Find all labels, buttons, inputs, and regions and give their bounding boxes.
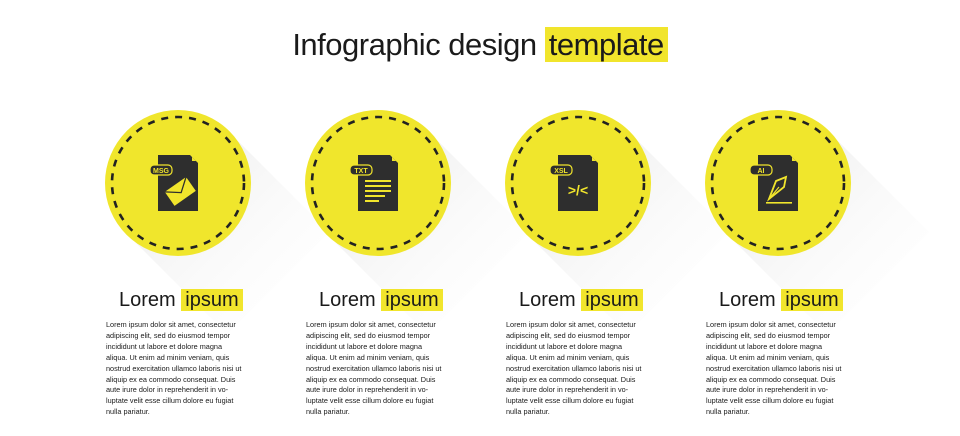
step 4 text: luptate velit esse cillum dolore eu fugiat bbox=[706, 396, 833, 405]
icon: TXT file: TXT bbox=[354, 168, 368, 175]
step 2 text: nostrud exercitation ullamco laboris nisi ut bbox=[306, 364, 441, 373]
step 2 circle bbox=[305, 110, 529, 334]
step 2 text: adipiscing elit, sed do eiusmod tempor bbox=[306, 331, 430, 340]
step 1 text: adipiscing elit, sed do eiusmod tempor bbox=[106, 331, 230, 340]
step 3 text: Lorem ipsum dolor sit amet, consectetur bbox=[506, 320, 636, 329]
step 4 text: adipiscing elit, sed do eiusmod tempor bbox=[706, 331, 830, 340]
icon: MSG file bbox=[150, 155, 198, 211]
step 2 heading: Lorem ipsum bbox=[319, 289, 439, 311]
step 3 heading: Lorem ipsum bbox=[519, 289, 639, 311]
step 2 text: nulla pariatur. bbox=[306, 407, 350, 416]
step 1 text: aute irure dolor in reprehenderit in vo- bbox=[106, 385, 228, 394]
step 2 text: aliquip ex ea commodo consequat. Duis bbox=[306, 375, 435, 384]
step 3 text: nostrud exercitation ullamco laboris nisi ut bbox=[506, 364, 641, 373]
step 4 text: nulla pariatur. bbox=[706, 407, 750, 416]
icon: XSL file: XSL bbox=[554, 168, 569, 175]
step 3 text: aliqua. Ut enim ad minim veniam, quis bbox=[506, 353, 629, 362]
step 3 text: adipiscing elit, sed do eiusmod tempor bbox=[506, 331, 630, 340]
step 4 text: aute irure dolor in reprehenderit in vo- bbox=[706, 385, 828, 394]
step 1 text: nulla pariatur. bbox=[106, 407, 150, 416]
step 4 heading: Lorem ipsum bbox=[719, 289, 839, 311]
step 2 text: aliqua. Ut enim ad minim veniam, quis bbox=[306, 353, 429, 362]
step 3 text bbox=[506, 320, 642, 416]
step 2 text: luptate velit esse cillum dolore eu fugiat bbox=[306, 396, 433, 405]
step 3 text: aliquip ex ea commodo consequat. Duis bbox=[506, 375, 635, 384]
step 2 text: Lorem ipsum dolor sit amet, consectetur bbox=[306, 320, 436, 329]
step 1 text: luptate velit esse cillum dolore eu fugiat bbox=[106, 396, 233, 405]
step 2 text bbox=[306, 320, 442, 416]
step 3 text: luptate velit esse cillum dolore eu fugiat bbox=[506, 396, 633, 405]
step 2 text: incididunt ut labore et dolore magna bbox=[306, 342, 422, 351]
step 1 text: aliqua. Ut enim ad minim veniam, quis bbox=[106, 353, 229, 362]
icon: XSL file bbox=[550, 155, 598, 211]
step 3 text: incididunt ut labore et dolore magna bbox=[506, 342, 622, 351]
step 1 circle bbox=[105, 110, 329, 334]
icon: TXT file bbox=[350, 155, 398, 211]
step 1 text: incididunt ut labore et dolore magna bbox=[106, 342, 222, 351]
step 4 text: aliqua. Ut enim ad minim veniam, quis bbox=[706, 353, 829, 362]
step 3 circle bbox=[505, 110, 729, 334]
step 3 text: aute irure dolor in reprehenderit in vo- bbox=[506, 385, 628, 394]
icon: MSG file: MSG bbox=[153, 168, 170, 175]
step 1 text: aliquip ex ea commodo consequat. Duis bbox=[106, 375, 235, 384]
step 1 text: Lorem ipsum dolor sit amet, consectetur bbox=[106, 320, 236, 329]
icon: AI file: AI bbox=[758, 168, 765, 175]
step 1 text bbox=[106, 320, 242, 416]
step 4 text: nostrud exercitation ullamco laboris nisi ut bbox=[706, 364, 841, 373]
icon: XSL file: >/< bbox=[568, 182, 588, 198]
step 4 text: aliquip ex ea commodo consequat. Duis bbox=[706, 375, 835, 384]
icon: AI file bbox=[750, 155, 798, 211]
step 4 text bbox=[706, 320, 842, 416]
step 4 circle bbox=[705, 110, 929, 334]
step 3 text: nulla pariatur. bbox=[506, 407, 550, 416]
step 4 text: incididunt ut labore et dolore magna bbox=[706, 342, 822, 351]
step 1 heading: Lorem ipsum bbox=[119, 289, 239, 311]
step 2 text: aute irure dolor in reprehenderit in vo- bbox=[306, 385, 428, 394]
title: Infographic design template bbox=[292, 27, 664, 62]
step 4 text: Lorem ipsum dolor sit amet, consectetur bbox=[706, 320, 836, 329]
step 1 text: nostrud exercitation ullamco laboris nisi ut bbox=[106, 364, 241, 373]
